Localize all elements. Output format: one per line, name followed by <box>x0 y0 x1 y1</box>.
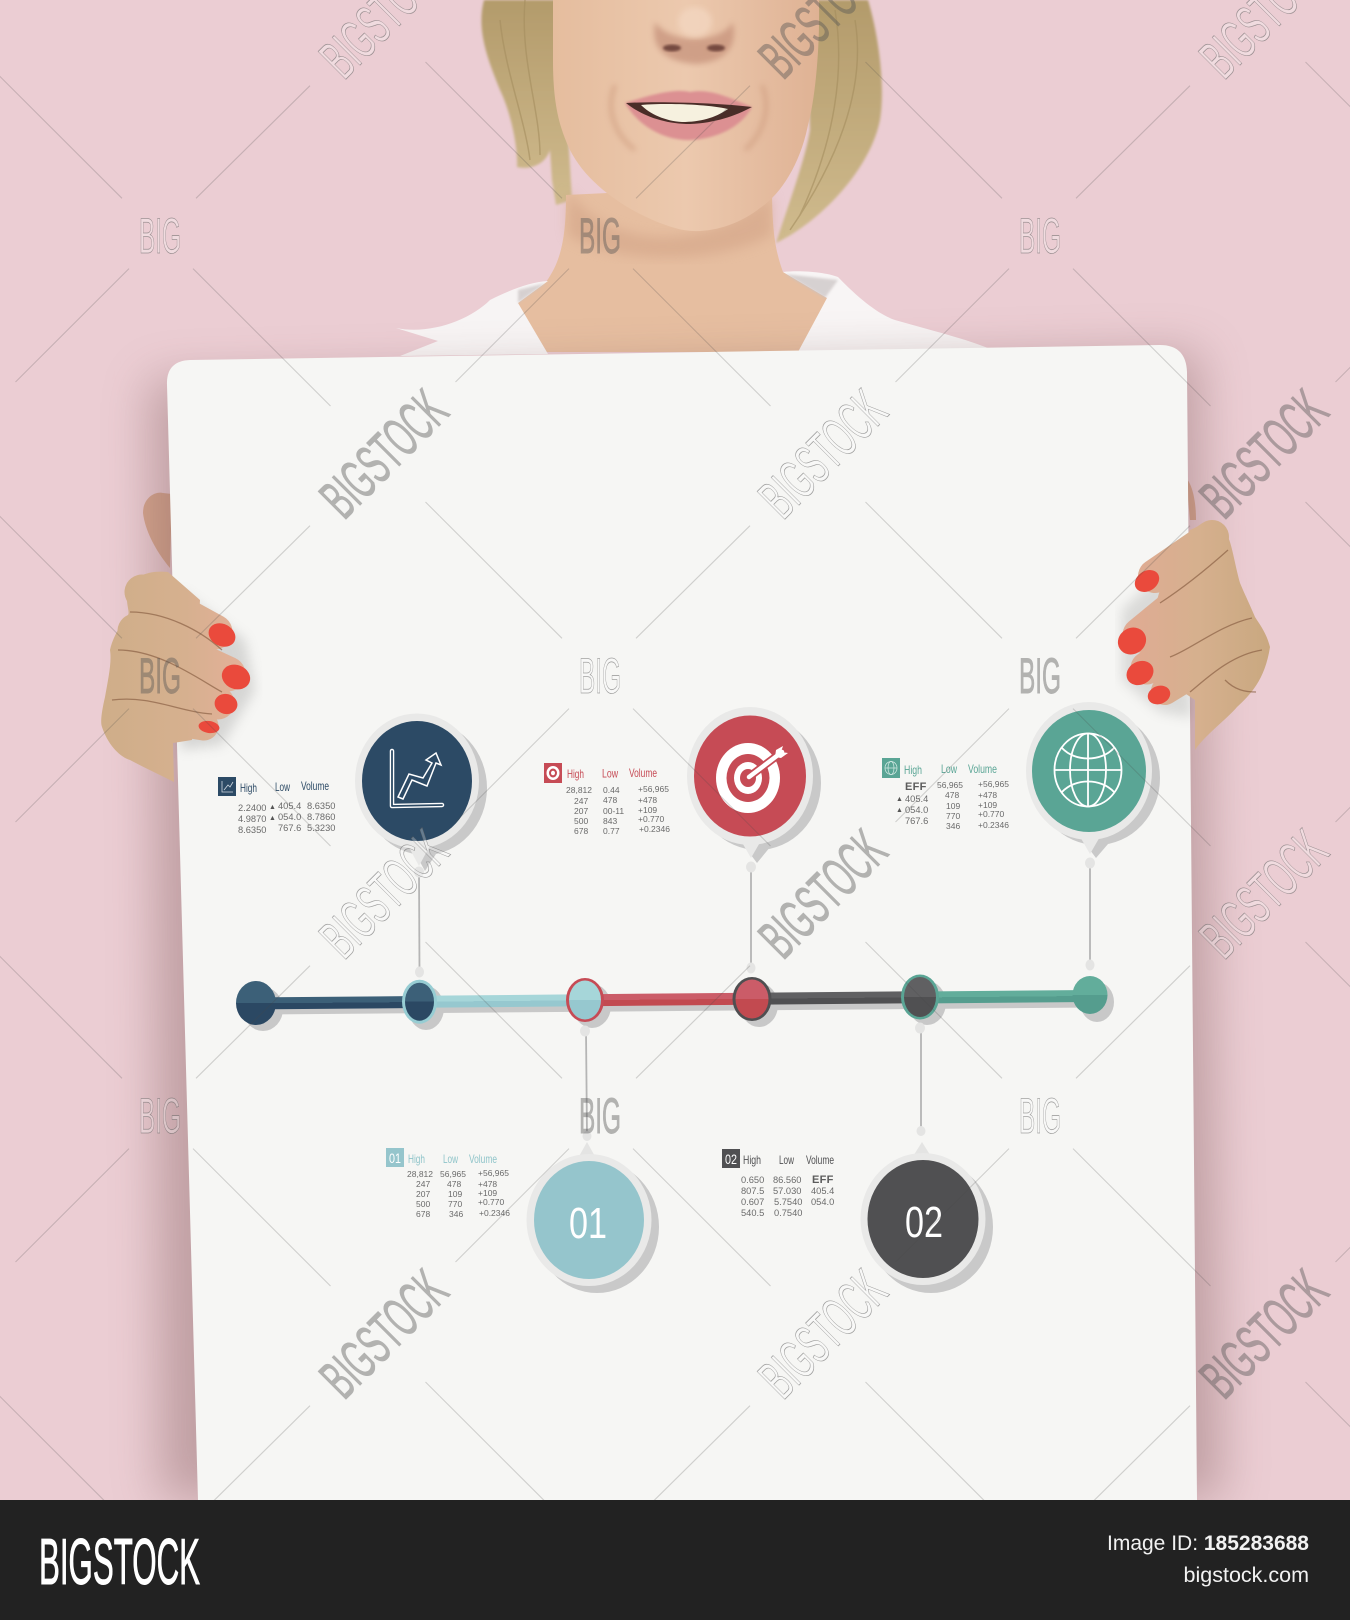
teeth <box>641 104 728 122</box>
watermark: BIGSTOCK repeats: BIGSTOCK <box>308 1258 460 1410</box>
table: 01: +0.2346 <box>479 1208 510 1218</box>
watermark: BIGSTOCK repeats: BIGSTOCK <box>747 818 899 970</box>
table: teal: +109 <box>978 800 997 810</box>
connector knobs <box>414 858 1095 1141</box>
watermark: BIGSTOCK repeats <box>308 0 1340 1410</box>
table: red: 478 <box>603 795 617 805</box>
table: 01: 346 <box>449 1209 463 1219</box>
shirt left <box>396 281 548 356</box>
table: red: 00-11 <box>603 806 624 816</box>
palm right <box>1145 520 1270 750</box>
table: teal: +56,965 <box>978 779 1009 789</box>
table: red: 0.77 <box>603 826 620 836</box>
table: 01: 678 <box>416 1209 430 1219</box>
table: teal: ▲ <box>896 807 903 814</box>
table: navy: 8.6350 <box>307 801 335 811</box>
nails right <box>1113 566 1173 707</box>
table: navy: 405.4 <box>278 801 301 811</box>
table: red: 207 <box>574 806 588 816</box>
segment 5 teal <box>920 990 1090 1003</box>
icon: line chart arrow <box>392 751 442 806</box>
creases <box>112 612 222 714</box>
segment 3 red <box>585 993 752 1006</box>
nostrils <box>663 44 725 52</box>
table: 01: 207 <box>416 1189 430 1199</box>
table: navy: 054.0 <box>278 812 301 822</box>
watermark: BIG repeats: BIG <box>139 208 181 264</box>
mini target icon <box>544 763 562 783</box>
mini globe icon <box>882 758 900 778</box>
table: red: 843 <box>603 816 617 826</box>
badge: globe icon <box>1026 702 1160 858</box>
table: 02: 5.7540 <box>774 1197 802 1207</box>
table: teal: 346 <box>946 821 960 831</box>
table: teal: 109 <box>946 801 960 811</box>
face <box>553 0 819 231</box>
table: teal: +0.2346 <box>978 820 1009 830</box>
watermark: BIG repeats: BIG <box>139 1088 181 1144</box>
collar shadows <box>518 274 838 303</box>
white board card <box>167 345 1197 1500</box>
watermark: BIG repeats <box>139 208 1061 1144</box>
node 3 <box>566 978 604 1022</box>
table: 01: High <box>408 1152 425 1166</box>
hand shadow on card <box>1122 550 1192 718</box>
table: 02: 57.030 <box>773 1186 801 1196</box>
table: navy: 4.9870 <box>238 814 266 824</box>
table: red: 28,812 <box>566 785 592 795</box>
hair right <box>776 0 882 243</box>
table: 01: 247 <box>416 1179 430 1189</box>
watermark: BIG repeats: BIG <box>139 648 181 704</box>
table: 02: 405.4 <box>811 1186 834 1196</box>
table: 01: 500 <box>416 1199 430 1209</box>
table: teal: 56,965 <box>937 780 963 790</box>
palm left <box>101 572 200 782</box>
table: 01: +56,965 <box>478 1168 509 1178</box>
left hand <box>101 572 255 782</box>
text: BIG <box>1019 1088 1061 1144</box>
table: 02: 0.607 <box>741 1197 764 1207</box>
table: navy: ▲ <box>269 804 276 811</box>
segment 1 navy <box>256 996 420 1009</box>
watermark: BIG repeats: BIG <box>579 648 621 704</box>
table: red: 678 <box>574 826 588 836</box>
text: BIG <box>1019 208 1061 264</box>
right hand <box>1113 520 1270 750</box>
text: BIG <box>1019 648 1061 704</box>
table: 01: +109 <box>478 1188 497 1198</box>
table: teal: +478 <box>978 790 997 800</box>
bar shadow <box>262 1001 1096 1008</box>
table: red: +0.2346 <box>639 824 670 834</box>
footer bar <box>0 1500 1350 1620</box>
table: navy: ▲ <box>269 815 276 822</box>
table: red: +478 <box>638 795 657 805</box>
table: teal: 054.0 <box>905 805 928 815</box>
table: red <box>544 763 670 836</box>
nose shading <box>654 22 734 64</box>
thumb right <box>1186 478 1196 520</box>
table: 01: 28,812 <box>407 1169 433 1179</box>
table: 02: Volume <box>806 1153 834 1167</box>
table: navy: 8.6350 <box>238 825 266 835</box>
badge: target icon <box>687 707 821 863</box>
node 5 <box>901 974 939 1020</box>
table: teal: EFF <box>905 781 927 793</box>
table: 02: 054.0 <box>811 1197 834 1207</box>
mini chart icon <box>218 777 236 796</box>
node 6 <box>1072 976 1108 1014</box>
table: red: 247 <box>574 796 588 806</box>
watermark: BIGSTOCK repeats: BIGSTOCK <box>308 818 460 970</box>
node 1 <box>236 981 276 1025</box>
watermark: BIG repeats: BIG <box>579 208 621 264</box>
table: 01: +478 <box>478 1179 497 1189</box>
smile lines <box>611 85 766 150</box>
table: teal: 478 <box>945 790 959 800</box>
icon: target with arrow <box>716 743 788 813</box>
table: 02: Low <box>779 1153 794 1167</box>
table: red: Volume <box>629 766 657 780</box>
table: 01: +0.770 <box>478 1197 505 1207</box>
table: navy: 8.7860 <box>307 812 335 822</box>
table: navy: 767.6 <box>278 823 301 833</box>
watermark: BIGSTOCK repeats: BIGSTOCK <box>747 1258 899 1410</box>
table: 02: 540.5 <box>741 1208 764 1218</box>
table: red: +109 <box>638 805 657 815</box>
table: red: Low <box>602 766 618 780</box>
table: navy: 5.3230 <box>307 823 335 833</box>
image id: Image ID: 185283688 <box>1107 1532 1309 1555</box>
node 2 <box>402 980 437 1024</box>
table: 02: 86.560 <box>773 1175 801 1185</box>
node shadows <box>243 981 1114 1031</box>
table: teal: ▲ <box>896 796 903 803</box>
jaw shadow <box>568 190 772 258</box>
connector stems <box>419 863 1090 1136</box>
table: 01: Low <box>443 1152 458 1166</box>
footer bar: BIGSTOCK <box>39 1525 200 1598</box>
nose highlight <box>678 7 712 37</box>
site url: bigstock.com <box>1184 1563 1309 1587</box>
table: teal <box>882 758 1009 831</box>
table: red: 0.44 <box>603 785 620 795</box>
table: teal: 767.6 <box>905 816 928 826</box>
table: teal: Low <box>941 762 957 776</box>
table: red: +56,965 <box>638 784 669 794</box>
fingers left <box>122 592 228 726</box>
number 01: 01 <box>569 1199 607 1248</box>
table: 01: Volume <box>469 1152 497 1166</box>
card shadow <box>150 352 1222 1500</box>
segment 2 light teal <box>420 994 585 1008</box>
watermark: BIGSTOCK repeats: BIGSTOCK <box>747 378 899 530</box>
table: 01: 56,965 <box>440 1169 466 1179</box>
photo: woman's head and shirt <box>143 0 1196 568</box>
table: 02 <box>722 1149 834 1218</box>
table: 02: 0.650 <box>741 1175 764 1185</box>
table: red: High <box>567 767 584 781</box>
table: 02: EFF <box>812 1174 834 1186</box>
table: navy: 2.2400 <box>238 803 266 813</box>
badge: 01 <box>526 1142 659 1293</box>
table: teal: Volume <box>968 762 997 776</box>
shirt right <box>783 271 990 352</box>
table: navy: High <box>240 781 257 795</box>
table: 01: 109 <box>448 1189 462 1199</box>
mini 02 tag: 02 <box>725 1151 737 1167</box>
timeline bar <box>236 974 1114 1031</box>
table: 01: 770 <box>448 1199 462 1209</box>
table: navy: Volume <box>301 779 329 793</box>
hair strands <box>500 0 857 230</box>
icon: globe <box>1054 734 1122 806</box>
lips <box>625 91 752 140</box>
mini 01 tag: 01 <box>389 1150 401 1166</box>
hair left <box>481 0 572 205</box>
thumb left <box>143 493 172 568</box>
nails left <box>198 619 254 734</box>
table: red: 500 <box>574 816 588 826</box>
hand shadow on card <box>180 590 255 750</box>
table: navy: Low <box>275 780 290 794</box>
table: 02: 807.5 <box>741 1186 764 1196</box>
table: teal: +0.770 <box>978 809 1005 819</box>
table: 01: 478 <box>447 1179 461 1189</box>
badge: chart icon <box>355 714 487 871</box>
table: teal: 770 <box>946 811 960 821</box>
mouth interior <box>626 102 752 124</box>
fingers right <box>1140 537 1240 691</box>
table: teal: High <box>904 763 922 777</box>
node 4 <box>732 977 772 1021</box>
badge: 02 <box>860 1142 993 1293</box>
number 02: 02 <box>905 1198 943 1247</box>
table: 02: High <box>743 1153 761 1167</box>
table: 01 <box>386 1148 510 1219</box>
table: 02: 0.7540 <box>774 1208 802 1218</box>
table: red: +0.770 <box>638 814 665 824</box>
neck <box>518 185 827 352</box>
segment 4 dark <box>752 991 920 1005</box>
watermark: BIGSTOCK repeats: BIGSTOCK <box>308 378 460 530</box>
creases right <box>1160 550 1262 692</box>
watermark: BIG repeats: BIG <box>579 1088 621 1144</box>
table: navy <box>218 777 335 835</box>
table: teal: 405.4 <box>905 794 928 804</box>
